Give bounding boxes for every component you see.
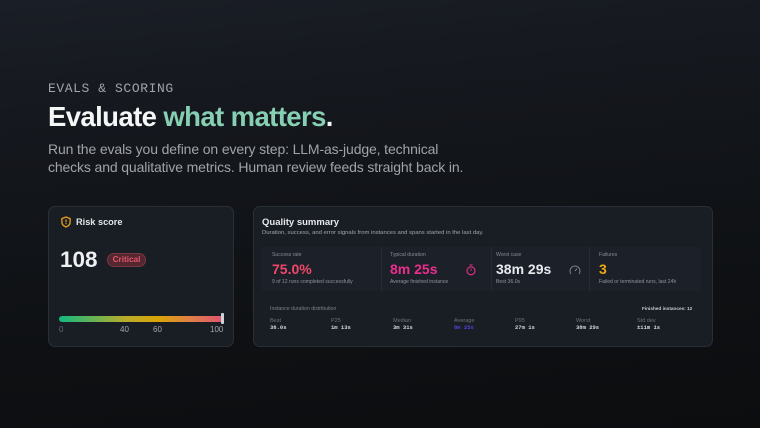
- note: Failed or terminated runs, last 24h: [599, 279, 676, 285]
- description: Run the evals you define on every step: LLM-as-judge, technical: [48, 141, 438, 157]
- finished instances count: Finished instances: 12: [642, 306, 692, 311]
- panel: quality summary: [253, 206, 713, 347]
- label: Worst case: [496, 252, 521, 258]
- description: [48, 141, 463, 175]
- value: 36.0s: [270, 324, 287, 331]
- axis label 60: 60: [153, 325, 162, 334]
- stat: worst: [576, 318, 599, 331]
- description: checks and qualitative metrics. Human review feeds straight back in.: [48, 158, 463, 174]
- value: 38m 29s: [576, 324, 599, 331]
- label: Median: [393, 318, 411, 324]
- risk marker: [221, 313, 224, 324]
- value: 38m 29s: [496, 261, 551, 277]
- stat: p25: [331, 318, 351, 331]
- title: Evaluate what matters.: [48, 101, 333, 132]
- label: P25: [331, 318, 341, 324]
- value: 8m 25s: [454, 324, 474, 331]
- label: Failures: [599, 252, 617, 258]
- heading: quality summary: Quality summary: [262, 217, 339, 228]
- icon: gauge: [570, 266, 580, 274]
- axis label 40: 40: [120, 325, 129, 334]
- stat: average: [454, 318, 474, 331]
- icon: shield alert: [61, 216, 71, 228]
- metric: typical duration: [382, 247, 492, 291]
- panel: risk score: [48, 206, 234, 347]
- label: Std dev: [637, 318, 656, 324]
- value: 27m 1s: [515, 324, 535, 331]
- label: Worst: [576, 318, 590, 324]
- value: 3: [599, 261, 607, 277]
- metric: worst case: [492, 247, 590, 291]
- stat: p95: [515, 318, 535, 331]
- risk gradient bar: [59, 316, 221, 322]
- axis label 100: 100: [210, 325, 223, 334]
- label: P95: [515, 318, 525, 324]
- metric: failures: [590, 247, 701, 291]
- metric: success rate: [262, 247, 382, 291]
- value: 75.0%: [272, 261, 312, 277]
- value: ±11m 1s: [637, 324, 660, 331]
- eyebrow: EVALS & SCORING: [48, 81, 174, 96]
- value: 3m 31s: [393, 324, 413, 331]
- stat: std dev: [637, 318, 660, 331]
- stat: median: [393, 318, 413, 331]
- axis label 0: 0: [59, 325, 63, 334]
- stat: best: [270, 318, 287, 331]
- value: 1m 13s: [331, 324, 351, 331]
- badge: critical: Critical: [113, 255, 140, 264]
- note: Average finished instance: [390, 279, 448, 285]
- summary description: Duration, success, and error signals from instances and spans started in the last day.: [262, 230, 484, 236]
- label: Typical duration: [390, 252, 426, 258]
- label: Average: [454, 318, 474, 324]
- icon: stopwatch: [466, 264, 476, 276]
- label: Success rate: [272, 252, 301, 258]
- value: 108: 108: [60, 247, 98, 272]
- distribution heading: Instance duration distribution: [270, 306, 336, 312]
- note: 9 of 12 runs completed successfully: [272, 279, 353, 285]
- note: Best 36.0s: [496, 279, 520, 285]
- label: Best: [270, 318, 281, 324]
- badge: critical: [107, 253, 146, 267]
- value: 8m 25s: [390, 261, 437, 277]
- heading: risk score: Risk score: [76, 217, 122, 227]
